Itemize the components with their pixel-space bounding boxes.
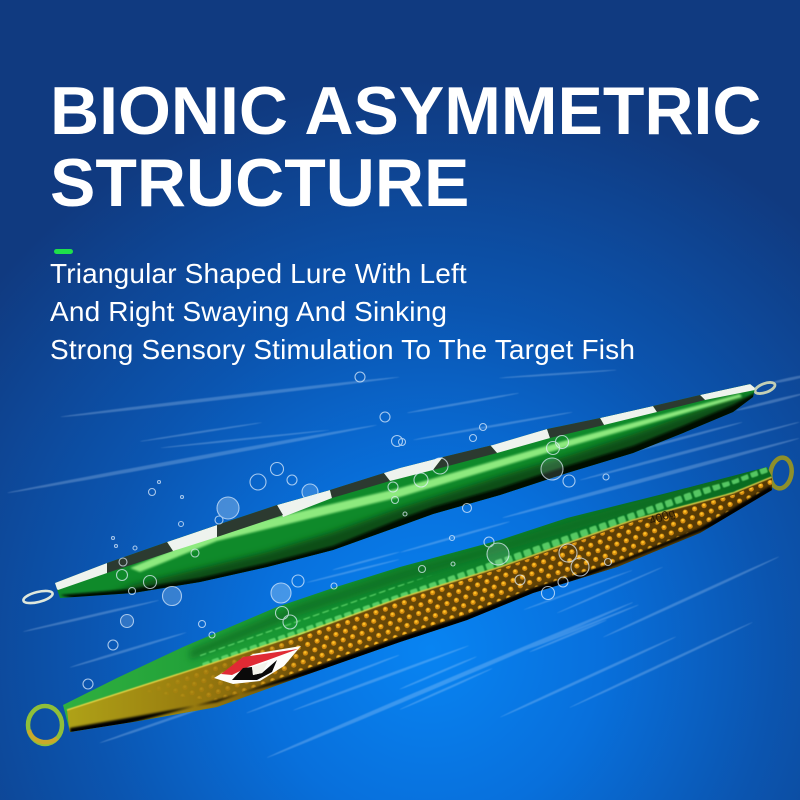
green accent bar <box>54 249 73 254</box>
lower lure: gold scale dots <box>130 479 772 701</box>
upper lure: body <box>55 384 755 598</box>
lower lure: rings <box>28 456 794 744</box>
title second line: STRUCTURE <box>50 145 469 221</box>
description text <box>50 258 738 660</box>
title: BIONIC ASYMMETRIC <box>50 73 761 149</box>
lower lure: body <box>63 467 772 732</box>
upper lure: dark bands <box>107 395 705 573</box>
description text: Strong Sensory Stimulation To The Target Fish <box>50 334 635 365</box>
upper lure: highlight streak <box>130 394 742 572</box>
lower lure: bottom shadow <box>70 486 780 740</box>
description text: Triangular Shaped Lure With Left <box>50 258 467 289</box>
lower lure: 400g marking: 400g <box>647 506 677 528</box>
lower lure: ridge highlight <box>67 477 772 710</box>
upper lure: eyelets <box>22 380 776 605</box>
lower lure: green scales <box>200 465 772 667</box>
air bubbles <box>83 372 612 689</box>
lower lure: gold flank <box>67 477 772 735</box>
upper lure: white bands <box>50 383 755 590</box>
lower lure: eye <box>214 646 301 684</box>
description text: And Right Swaying And Sinking <box>50 296 447 327</box>
speed lines <box>7 369 800 760</box>
